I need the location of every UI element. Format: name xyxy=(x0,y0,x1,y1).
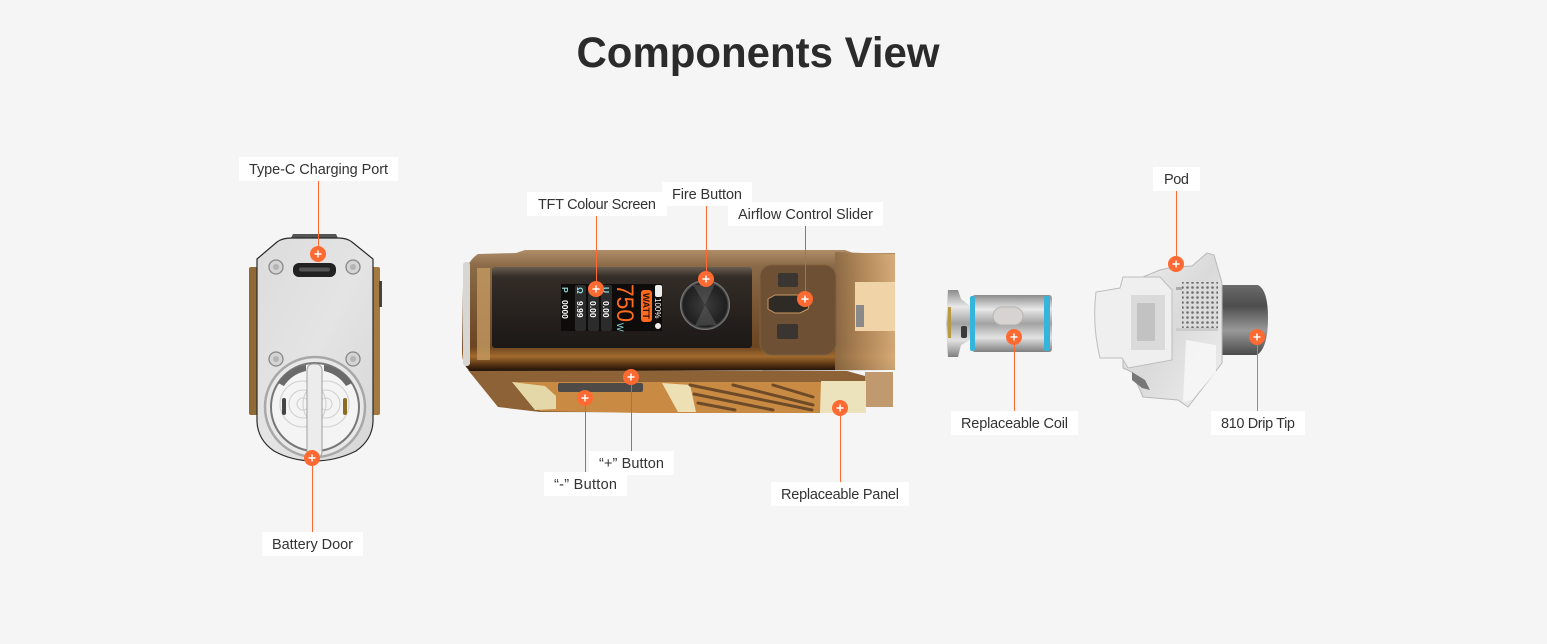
callout: Replaceable Panel xyxy=(771,400,909,506)
rear fin and lower body xyxy=(1123,253,1222,407)
callout: + Button xyxy=(589,369,674,475)
display readout: W xyxy=(615,323,625,332)
screws xyxy=(269,260,360,366)
callout: TFT Colour Screen: TFT Colour Screen xyxy=(538,197,656,213)
device: pod xyxy=(1095,253,1268,407)
device: bottom view of mod xyxy=(249,234,382,461)
airflow slider xyxy=(760,265,836,355)
display readout: WATT xyxy=(641,293,651,320)
callout: Airflow Control Slider: Airflow Control Slider xyxy=(738,207,873,223)
callout: Replaceable Panel: Replaceable Panel xyxy=(781,487,899,503)
panel vents xyxy=(690,385,813,410)
display readout xyxy=(560,284,662,332)
display readout: 9.99 xyxy=(575,301,585,318)
callout: Battery Door: Battery Door xyxy=(272,537,353,553)
callout: TFT Colour Screen xyxy=(527,192,667,297)
front cylinder xyxy=(1095,277,1172,368)
display readout: 100% xyxy=(653,298,662,318)
Type-C port xyxy=(293,263,336,277)
callout: Airflow Control Slider xyxy=(728,202,883,307)
device: replaceable coil xyxy=(946,290,1052,357)
amber side edge right xyxy=(371,267,380,415)
screen panel xyxy=(492,267,752,348)
callout: Type-C Charging Port xyxy=(239,157,398,262)
battery door xyxy=(265,357,365,457)
callout: Fire Button: Fire Button xyxy=(672,187,742,203)
callout: Fire Button xyxy=(662,182,752,287)
display readout: 0000 xyxy=(560,300,570,319)
amber side edge left xyxy=(249,267,259,415)
metal plate xyxy=(257,238,373,461)
callout: - Button: “-” Button xyxy=(554,477,617,493)
callout: - Button xyxy=(544,390,627,496)
callout: Pod: Pod xyxy=(1164,172,1189,188)
callout: 810 Drip Tip: 810 Drip Tip xyxy=(1221,416,1295,432)
lower body xyxy=(468,370,865,413)
callout: 810 Drip Tip xyxy=(1211,329,1305,435)
callout: Replaceable Coil: Replaceable Coil xyxy=(961,416,1068,432)
callout: Replaceable Coil xyxy=(951,329,1078,435)
side buttons xyxy=(558,383,643,392)
display readout: P xyxy=(560,287,570,293)
main amber shell xyxy=(462,250,895,371)
callout: + Button: “+” Button xyxy=(599,456,664,472)
fire button xyxy=(680,280,730,330)
callout: Pod xyxy=(1153,167,1200,272)
replaceable panel xyxy=(512,381,866,413)
810 drip tip xyxy=(1220,285,1268,355)
callout: Type-C Charging Port: Type-C Charging Port xyxy=(249,162,388,178)
device: front view of mod xyxy=(462,250,895,413)
right end of shell xyxy=(835,252,895,370)
display readout: 0.00 xyxy=(588,301,598,318)
display readout: 750 xyxy=(611,284,638,322)
display readout: Ω xyxy=(575,287,585,294)
display readout: U xyxy=(601,287,611,293)
title: Components View xyxy=(576,29,940,77)
mesh xyxy=(1182,282,1218,330)
display readout: 0.00 xyxy=(601,301,611,318)
callout: Battery Door xyxy=(262,450,363,556)
